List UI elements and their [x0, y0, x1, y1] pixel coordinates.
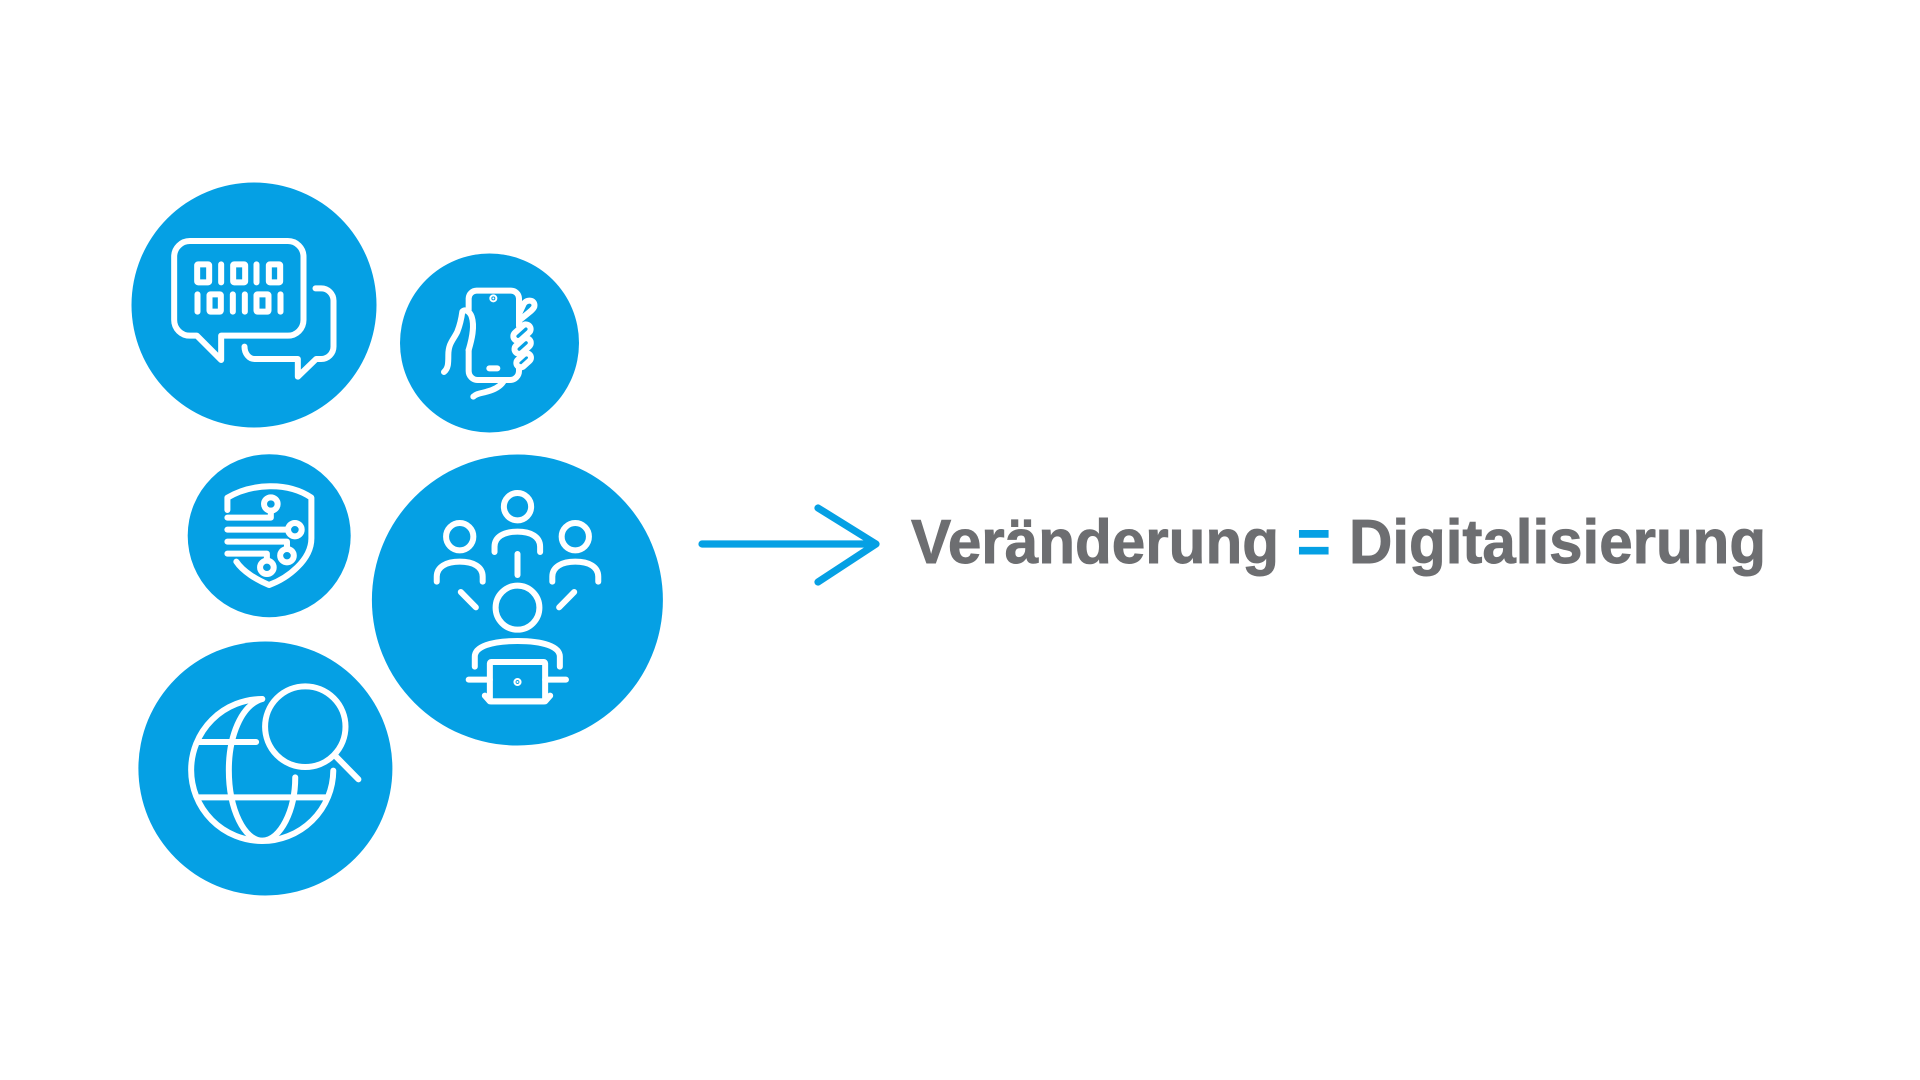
icon: people connected to laptop user — [437, 493, 598, 701]
title: Veränderung = Digitalisierung: Veränderung — [911, 507, 1279, 577]
title: Veränderung = Digitalisierung — [911, 507, 1766, 577]
icon: speech bubbles with binary code — [174, 241, 333, 377]
title: Veränderung = Digitalisierung: Digitalisierung — [1349, 507, 1766, 577]
title: Veränderung = Digitalisierung: = — [1297, 507, 1330, 577]
panel: cyber security shield — [188, 454, 351, 617]
arrow — [702, 508, 876, 582]
icon: hand holding smartphone — [444, 291, 534, 397]
panel: global search — [138, 642, 392, 896]
icon: globe with magnifying glass — [191, 686, 358, 841]
icon: shield with circuit lines — [227, 486, 311, 585]
panel: team around laptop — [372, 454, 663, 746]
panel: binary chat bubbles — [132, 182, 376, 428]
panel: smartphone in hand — [400, 254, 579, 432]
